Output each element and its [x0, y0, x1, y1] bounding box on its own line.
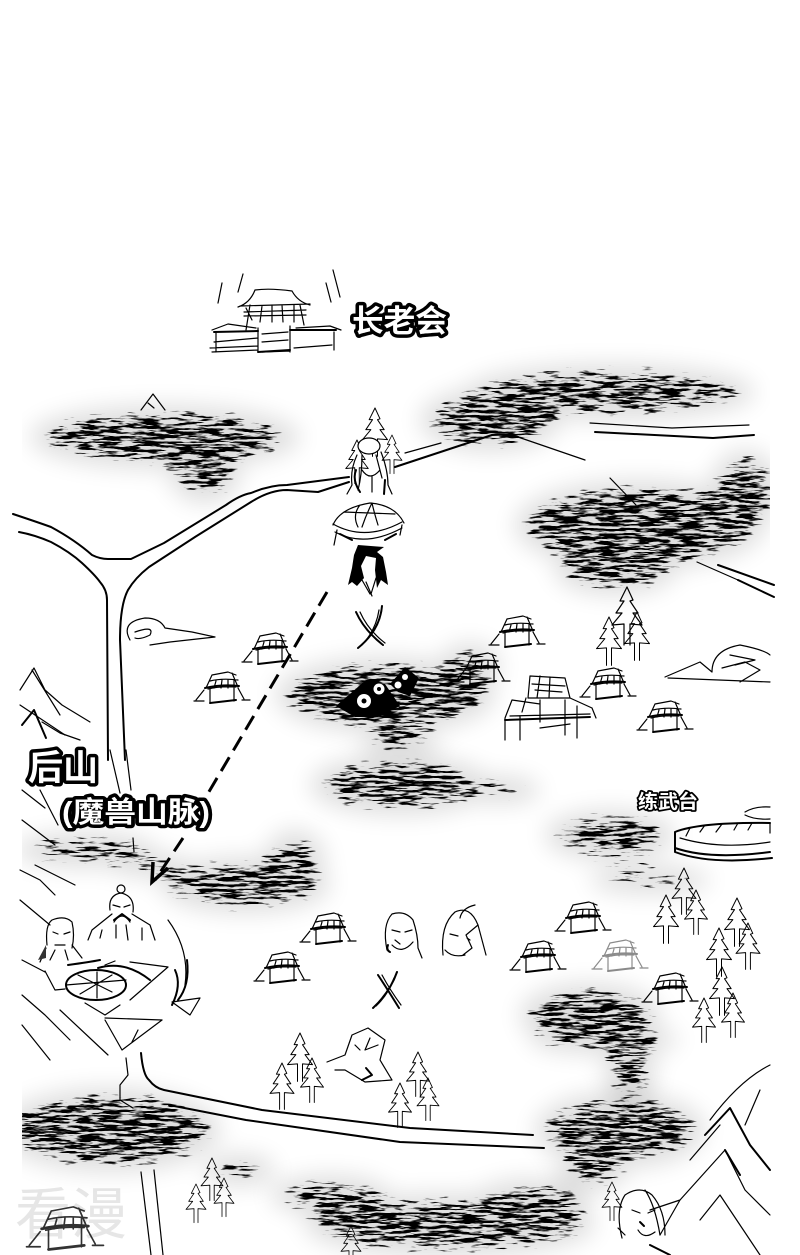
- palace: elders council: [210, 270, 341, 352]
- crossed swords two: [373, 972, 401, 1008]
- house cluster: [505, 676, 596, 740]
- long-haired swordsman: [348, 545, 388, 596]
- ink patch: bottom right forest: [535, 1092, 705, 1191]
- bearded man head: [385, 913, 422, 958]
- ink forests: [0, 364, 780, 1255]
- ink patch: left middle forest: [15, 830, 330, 913]
- label: elders council: 长老会: [352, 304, 447, 339]
- ink creatures: [336, 667, 419, 717]
- houses: [26, 616, 698, 1250]
- left mountains: [20, 668, 90, 925]
- ink patch: centre forest: [275, 643, 500, 757]
- dashed arrow: [152, 592, 327, 882]
- hat figure: straw hat: [333, 503, 404, 545]
- stone altar platforms: [22, 920, 200, 1060]
- bottom right woman: [618, 1190, 665, 1238]
- clouds: [127, 618, 770, 682]
- ink patch: bottom left forest: [0, 1088, 275, 1186]
- small peak: [141, 394, 165, 410]
- elder with topknot: [88, 885, 155, 940]
- crossed swords: [356, 606, 385, 648]
- ink patch: lower right forest: [520, 983, 680, 1108]
- ink patch: right forest: [515, 450, 780, 595]
- ink patch: top right forest: [420, 364, 755, 452]
- ink patch: top left forest: [30, 405, 300, 503]
- label: monster beast mountains: (魔兽山脉): [62, 796, 210, 829]
- road figure: veiled woman: [347, 438, 392, 494]
- ponytail woman head: [442, 905, 486, 956]
- label: back mountain: 后山: [28, 749, 98, 788]
- label: training platform: 练武台: [638, 790, 698, 813]
- trees: [186, 408, 760, 1255]
- bottom right mountains: [650, 1065, 770, 1255]
- ink patch: middle arc forest: [310, 755, 710, 894]
- watermark: 看漫: [15, 1183, 127, 1246]
- roads: [13, 423, 774, 1255]
- elder with long hair: [38, 918, 82, 962]
- broken rock: [327, 1028, 392, 1082]
- training arena: [675, 807, 772, 860]
- ink patch: bottom forest: [270, 1175, 595, 1255]
